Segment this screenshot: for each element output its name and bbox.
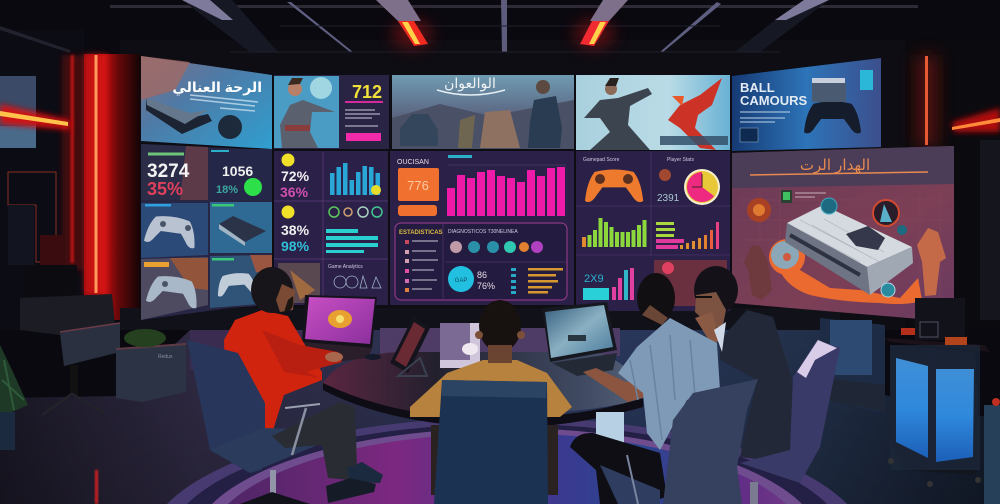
small chart: teal block and pink columns xyxy=(583,268,634,300)
sub-panel: legend and indicators: ESTADISTICAS xyxy=(399,230,443,236)
side cabinet with blue glow xyxy=(885,298,1000,504)
icon: orange gamepad xyxy=(585,169,643,202)
round game icons xyxy=(747,198,907,297)
sub-panel: legend and indicators: 86 xyxy=(477,270,487,280)
person: blue striped shirt xyxy=(570,273,720,504)
panel: central revenue dashboard: OUCISAN xyxy=(397,159,429,166)
bar chart: blue columns xyxy=(330,163,380,195)
chair: hoodie person xyxy=(740,340,840,504)
stat tile: 1056 xyxy=(210,149,272,200)
panel: orange gamepad and growth charts xyxy=(576,151,730,311)
bar chart: green columns xyxy=(582,218,646,247)
panel: controller promo xyxy=(732,58,881,151)
laptop: snowy racing game xyxy=(542,302,617,376)
tile: blue console xyxy=(210,202,272,253)
stat tile: 1056: 18% xyxy=(216,184,238,196)
planter with shrub xyxy=(116,329,186,402)
panel: hero and score card xyxy=(274,75,389,149)
panel: percentage dashboard with charts: 38% xyxy=(281,222,310,238)
person: red shirt torso xyxy=(224,267,343,445)
right wall neon xyxy=(905,40,1000,330)
floor rug xyxy=(167,417,847,504)
stat tile: 3274: 35% xyxy=(147,179,183,199)
icon: disc xyxy=(769,239,805,275)
tile: orange burst controller xyxy=(141,257,208,320)
panel: orange gamepad and growth charts: 2391 xyxy=(657,193,680,204)
stat tile: 3274: 3274 xyxy=(147,161,190,182)
sub-panel: legend and indicators: GAP xyxy=(455,278,467,284)
left wall with red neon xyxy=(0,26,140,330)
tile: white controller xyxy=(141,203,208,258)
panel: warrior and red dragon art xyxy=(576,75,730,150)
chair: striped shirt person xyxy=(600,379,758,504)
laptop: magenta explosion xyxy=(300,295,381,362)
panel: percentage dashboard with charts: 98% xyxy=(281,238,310,254)
left furniture xyxy=(20,265,120,415)
panel: percentage dashboard with charts xyxy=(274,151,388,305)
bar chart: magenta columns xyxy=(447,167,565,216)
potted plant xyxy=(0,345,28,450)
panel: game artwork with arabic title: الوالعوان xyxy=(444,75,496,92)
small chart: teal block and pink columns: 2X9 xyxy=(584,273,604,285)
screen stand xyxy=(818,318,885,412)
equipment on cabinet xyxy=(901,298,967,345)
panel: game artwork with arabic title xyxy=(392,75,574,149)
chair: left xyxy=(187,340,340,504)
panel: percentage dashboard with charts: Game Analytics xyxy=(328,264,363,270)
planter with shrub: Redux xyxy=(158,354,173,360)
big screen title: الهدار الرت xyxy=(800,157,870,174)
bar chart: rising orange pink xyxy=(656,222,719,249)
panel: console promo screen top left xyxy=(141,56,272,149)
panel: left stat and controller tiles xyxy=(141,144,272,320)
gauge xyxy=(684,169,720,205)
chair: center xyxy=(431,380,558,504)
panel: large console infographic screen xyxy=(732,146,954,322)
panel: central revenue dashboard xyxy=(390,151,574,305)
meeting table xyxy=(323,352,645,444)
panel: hero and score card: 712 xyxy=(352,82,382,102)
person: center ochre shirt xyxy=(410,300,572,417)
stat tile: 3274 xyxy=(141,144,208,200)
sub-panel: legend and indicators: 76% xyxy=(477,281,495,291)
panel: orange gamepad and growth charts: Gamepad Score xyxy=(583,157,620,163)
panel: console promo screen top left: الرحة العنالي xyxy=(172,79,262,96)
bar chart: teal rows xyxy=(326,229,378,253)
floor xyxy=(0,308,1000,504)
tablet on stand xyxy=(390,317,430,376)
ceiling red lights xyxy=(376,0,628,48)
stat tile: 1056: 1056 xyxy=(222,163,253,179)
panel: controller promo: CAMOURS xyxy=(740,93,807,108)
panel: orange gamepad and growth charts: Player Stats xyxy=(667,157,694,163)
person: hoodie with glasses xyxy=(694,266,797,463)
panel: controller promo: BALL xyxy=(740,80,775,95)
icon row xyxy=(329,207,382,217)
panel: percentage dashboard with charts: 72% xyxy=(281,168,310,184)
tile: controller on blue xyxy=(210,255,272,308)
figure: right warrior xyxy=(917,228,946,296)
sub-panel: legend and indicators: DIAGNOSTICOS T30NELINEA xyxy=(448,229,518,235)
panel: central revenue dashboard: 776 xyxy=(407,178,429,193)
sub-panel: legend and indicators xyxy=(395,223,567,300)
figure: left warrior xyxy=(744,245,772,300)
laptop: center rear xyxy=(440,323,480,368)
panel: percentage dashboard with charts: 36% xyxy=(280,184,309,200)
orange swoosh xyxy=(775,250,922,304)
person: red shirt legs xyxy=(272,402,383,503)
console illustration xyxy=(785,205,913,295)
